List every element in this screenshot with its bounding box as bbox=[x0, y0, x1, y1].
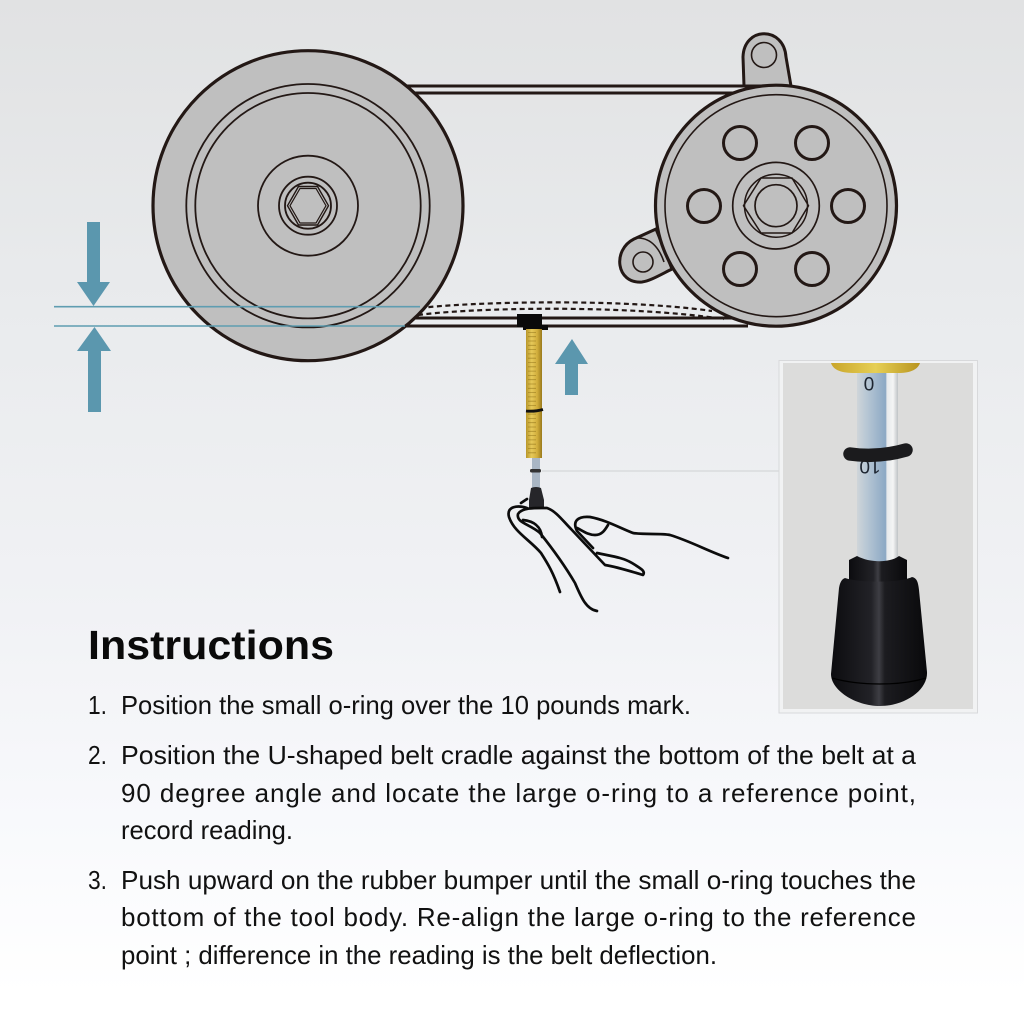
belt cradle bbox=[517, 314, 548, 330]
instruction 3: Push upward on the rubber bumper until the small o-ring touches the bbox=[121, 865, 916, 895]
small pulley top mounting ear bbox=[743, 34, 791, 86]
gold scale ticks bbox=[528, 332, 536, 455]
arrow: up bbox=[77, 327, 111, 412]
rubber bumper collar bbox=[849, 556, 907, 585]
arrow: push up bbox=[555, 339, 588, 395]
instruction 2: record reading. bbox=[121, 815, 293, 845]
hand holding tool bbox=[509, 499, 728, 611]
small o-ring bbox=[850, 450, 906, 455]
large pulley bbox=[153, 51, 463, 361]
instruction 3 bbox=[88, 865, 916, 970]
instruction 3: 3. bbox=[88, 865, 107, 895]
belt: dashed deflected position bbox=[418, 302, 724, 319]
gold body end bbox=[831, 363, 920, 373]
photo inset: bumper close-up bbox=[779, 360, 978, 713]
instruction 2: 2. bbox=[88, 740, 107, 770]
instruction 3: bottom of the tool body. Re-align the large o-ring to the reference bbox=[121, 902, 916, 932]
belt: solid top and bottom runs bbox=[400, 86, 750, 326]
arrow: down bbox=[77, 222, 110, 306]
gold tool body bbox=[526, 329, 542, 458]
large o-ring bbox=[526, 410, 543, 411]
instruction 3: point ; difference in the reading is the belt deflection. bbox=[121, 940, 717, 970]
rubber bumper bbox=[831, 577, 927, 706]
steel rod bbox=[857, 373, 898, 563]
deflection measurement lines bbox=[54, 307, 420, 326]
instruction 2 bbox=[88, 740, 917, 845]
inset photo background bbox=[783, 363, 973, 709]
scale numeral 10: 10 bbox=[859, 455, 881, 476]
tension gauge tool bbox=[517, 314, 548, 508]
scale numeral 0: 0 bbox=[864, 372, 874, 393]
instruction 1: 1. bbox=[88, 690, 107, 720]
rubber bumper bbox=[529, 487, 544, 508]
small pulley bbox=[656, 85, 896, 326]
connector line to inset bbox=[542, 470, 780, 472]
inset frame bbox=[779, 360, 978, 713]
instruction 2: 90 degree angle and locate the large o-ring to a reference point, bbox=[121, 778, 916, 808]
small pulley left mounting ear bbox=[620, 229, 672, 282]
small o-ring bbox=[530, 469, 541, 472]
instruction 1: Position the small o-ring over the 10 pounds mark. bbox=[121, 690, 691, 720]
title: Instructions bbox=[88, 622, 334, 668]
instruction 2: Position the U-shaped belt cradle against the bottom of the belt at a bbox=[121, 740, 917, 770]
bumper ridge line bbox=[832, 678, 926, 684]
steel plunger bbox=[532, 458, 540, 490]
